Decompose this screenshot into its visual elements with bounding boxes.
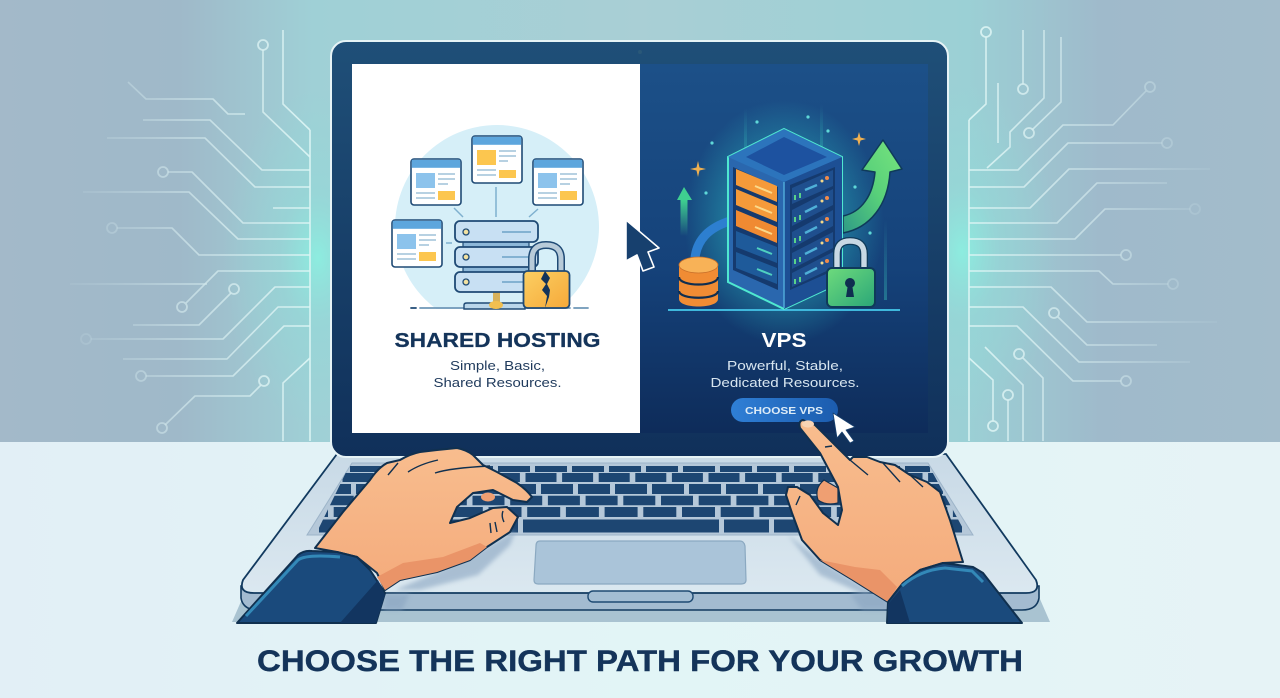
right wrist shading [820,560,897,602]
keys [284,469,970,526]
right fingernail [802,420,814,428]
icon: vps illustration [668,100,902,344]
icon: shared hosting illustration [392,125,599,329]
left sleeve [237,551,385,623]
light particles [704,115,872,235]
heading: vps: VPS [762,329,806,352]
ground line [411,307,588,309]
website window lower left [392,220,442,267]
text: shared hosting description: Simple, Basic, [450,358,545,373]
left fingertip [481,492,495,502]
desk surface [0,442,1280,698]
icon: database coins [679,257,718,306]
icon: cracked padlock [524,245,570,308]
front notch [588,591,693,602]
left finger creases [388,460,504,533]
connector lines [446,187,538,243]
webcam [638,50,642,54]
curved green growth arrow [843,140,902,233]
base shadow [232,590,1050,622]
middle fingertip behind index [817,480,838,504]
curved blue arrow [695,221,730,258]
text: vps description: Dedicated Resources. [710,375,860,390]
platform line [668,309,900,311]
right finger creases [796,446,923,505]
icon: green padlock [827,241,875,307]
server glow [684,100,884,344]
left wrist shading [377,543,487,590]
panel: vps [640,64,928,433]
left circuit traces [70,30,310,441]
heading: shared hosting: SHARED HOSTING [394,329,600,352]
right sleeve [887,563,1022,623]
right hand [786,420,963,602]
keyboard well [307,463,973,535]
left hand [315,448,532,590]
sparkles [690,132,866,177]
right drive bays [792,170,833,287]
right screen glow [867,82,1057,422]
website window top [472,136,522,183]
laptop base [232,454,1050,622]
small growth arrow [677,187,692,236]
front edge [241,586,1039,610]
left sleeve and hand [237,448,532,623]
website window left [411,159,461,205]
text: vps description: Powerful, Stable, [727,358,843,373]
hand shadows [384,530,888,610]
button: choose vps: CHOOSE VPS [745,405,823,417]
laptop lid [331,41,948,457]
light beams [744,104,887,300]
server tower [728,129,842,309]
text: shared hosting description: Shared Resources. [434,375,562,390]
left screen glow [223,88,413,428]
text: vps description [710,358,860,390]
button: choose vps [731,398,838,422]
title: CHOOSE THE RIGHT PATH FOR YOUR GROWTH [257,645,1023,678]
shared server stack [455,221,538,309]
website window right [533,159,583,205]
trackpad [534,541,746,584]
right circuit traces [969,27,1217,441]
panel: shared hosting [352,64,640,433]
icon: dark cursor [626,220,659,271]
icon: white cursor [833,413,855,443]
background wall [0,0,1280,443]
text: shared hosting description [434,358,562,390]
right hand and sleeve [786,420,1022,623]
deck [242,454,1037,593]
left drive bays [736,169,777,284]
